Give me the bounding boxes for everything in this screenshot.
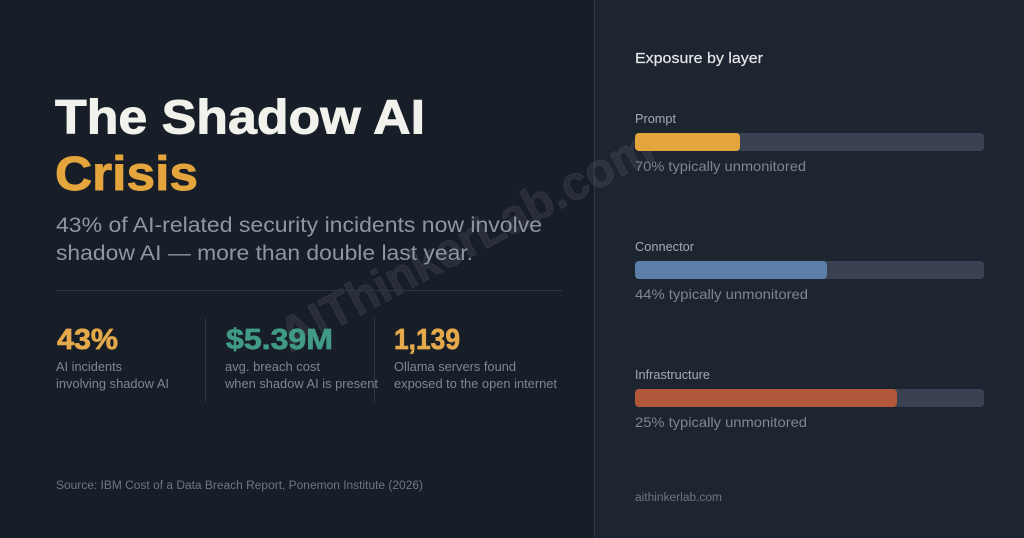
text block: subtitle (56, 213, 542, 265)
panel: right background (594, 0, 1024, 538)
stat: 1,139 Ollama servers: 1,139 (394, 324, 460, 356)
bar: Infrastructure: 25% typically unmonitored (635, 414, 807, 430)
watermark: AIThinkerLab.com (270, 121, 662, 363)
text block: source: Source: IBM Cost of a Data Breach Report, Ponemon Institute (2026) (56, 480, 423, 492)
text block: subtitle: 43% of AI-related security incidents now involve (56, 213, 542, 237)
heading: title: Crisis (55, 148, 198, 201)
bar: Infrastructure: Infrastructure (635, 368, 710, 382)
text block: site url: aithinkerlab.com (635, 492, 722, 504)
stat: $5.39M breach cost (224, 324, 379, 391)
bar: Prompt (635, 112, 984, 174)
stat: 43% AI incidents: 43% (57, 324, 118, 356)
stat: 43% AI incidents (56, 324, 169, 391)
heading: title (55, 92, 425, 201)
bar: Connector: 44% typically unmonitored (635, 286, 808, 302)
text block: subtitle: shadow AI — more than double last year. (56, 241, 473, 265)
stat: 43% AI incidents: AI incidents (56, 360, 122, 374)
bar: Prompt: 70% typically unmonitored (635, 158, 806, 174)
bar: Connector: Connector (635, 240, 694, 254)
heading: exposure by layer: Exposure by layer (635, 50, 763, 67)
stat: $5.39M breach cost: avg. breach cost (225, 360, 321, 374)
stat: 1,139 Ollama servers: exposed to the open internet (394, 377, 558, 391)
bar: Connector (635, 240, 984, 302)
stat: 43% AI incidents: involving shadow AI (56, 377, 169, 391)
bar: Infrastructure (635, 368, 984, 430)
stat: $5.39M breach cost: $5.39M (226, 324, 333, 356)
bar: Prompt: Prompt (635, 112, 677, 126)
stat: 1,139 Ollama servers: Ollama servers found (394, 360, 516, 374)
stat: 1,139 Ollama servers (394, 324, 558, 391)
heading: title: The Shadow AI (55, 92, 425, 144)
stat: $5.39M breach cost: when shadow AI is present (224, 377, 379, 391)
panel: left background (0, 0, 594, 538)
